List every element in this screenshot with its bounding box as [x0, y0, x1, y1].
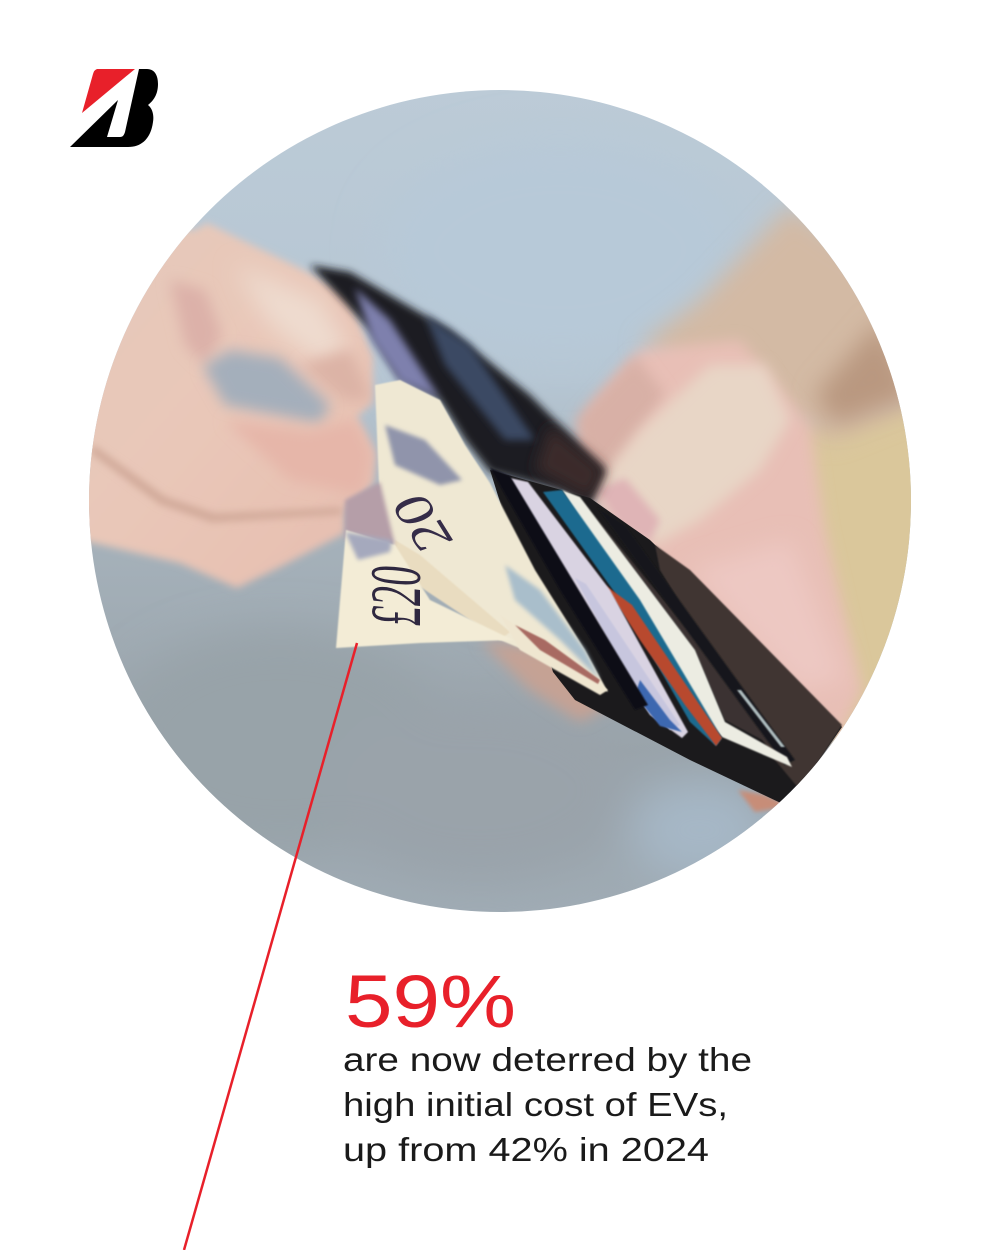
- left hand: gap between fingers: [203, 350, 330, 423]
- left hand silhouette: [60, 223, 375, 588]
- teal and orange card: [543, 490, 722, 746]
- left hand: shaded web between fingers: [170, 280, 222, 365]
- description text: high initial cost of EVs,: [343, 1086, 728, 1123]
- beige background at right: [808, 403, 911, 746]
- banknote blue pattern: [505, 565, 600, 680]
- right thumb: [592, 365, 790, 545]
- right hand palm: [570, 340, 862, 740]
- lower hand behind wallet: [484, 640, 604, 725]
- silver card edge: [737, 690, 785, 747]
- pinched note behind: [345, 482, 395, 545]
- red leader line from banknote to statistic: [184, 643, 357, 1250]
- Bridgestone logo: [70, 69, 158, 147]
- black back card slot: [597, 507, 795, 765]
- logo: red wedge: [82, 69, 135, 113]
- statistic text block: [343, 960, 752, 1168]
- headline figure: 59%: 59%: [345, 960, 516, 1043]
- right forearm: [639, 202, 901, 433]
- left hand: finger highlight: [246, 274, 348, 358]
- left hand: crease between middle and lower finger: [90, 445, 342, 522]
- wallet interior behind white card: [600, 522, 763, 740]
- wallet brown outer edge: [655, 545, 842, 790]
- left hand: middle finger pink underside: [240, 424, 372, 486]
- description text: [343, 1041, 752, 1168]
- description text: up from 42% in 2024: [343, 1131, 709, 1168]
- logo: black B: [70, 69, 158, 147]
- white card: [562, 490, 792, 767]
- wallet divider black stripes: [490, 468, 648, 710]
- shirt tone variation: [128, 659, 768, 876]
- banknote denomination: front note: £20: [356, 566, 436, 626]
- banknote stack edges: [395, 540, 510, 640]
- wallet leather body: [490, 470, 842, 806]
- infographic canvas: [70, 69, 911, 1250]
- banknote denomination: back note: 20: [383, 483, 463, 564]
- photo background: blurred shirt: [80, 80, 920, 920]
- wallet back panel: [310, 265, 605, 505]
- description text: are now deterred by the: [343, 1041, 752, 1078]
- lilac card: [510, 478, 688, 738]
- left hand: fingertip shadow: [306, 350, 368, 400]
- front banknote: [336, 530, 513, 648]
- back banknote: [375, 380, 608, 692]
- photo: hands holding an open wallet with banknotes: [60, 80, 930, 920]
